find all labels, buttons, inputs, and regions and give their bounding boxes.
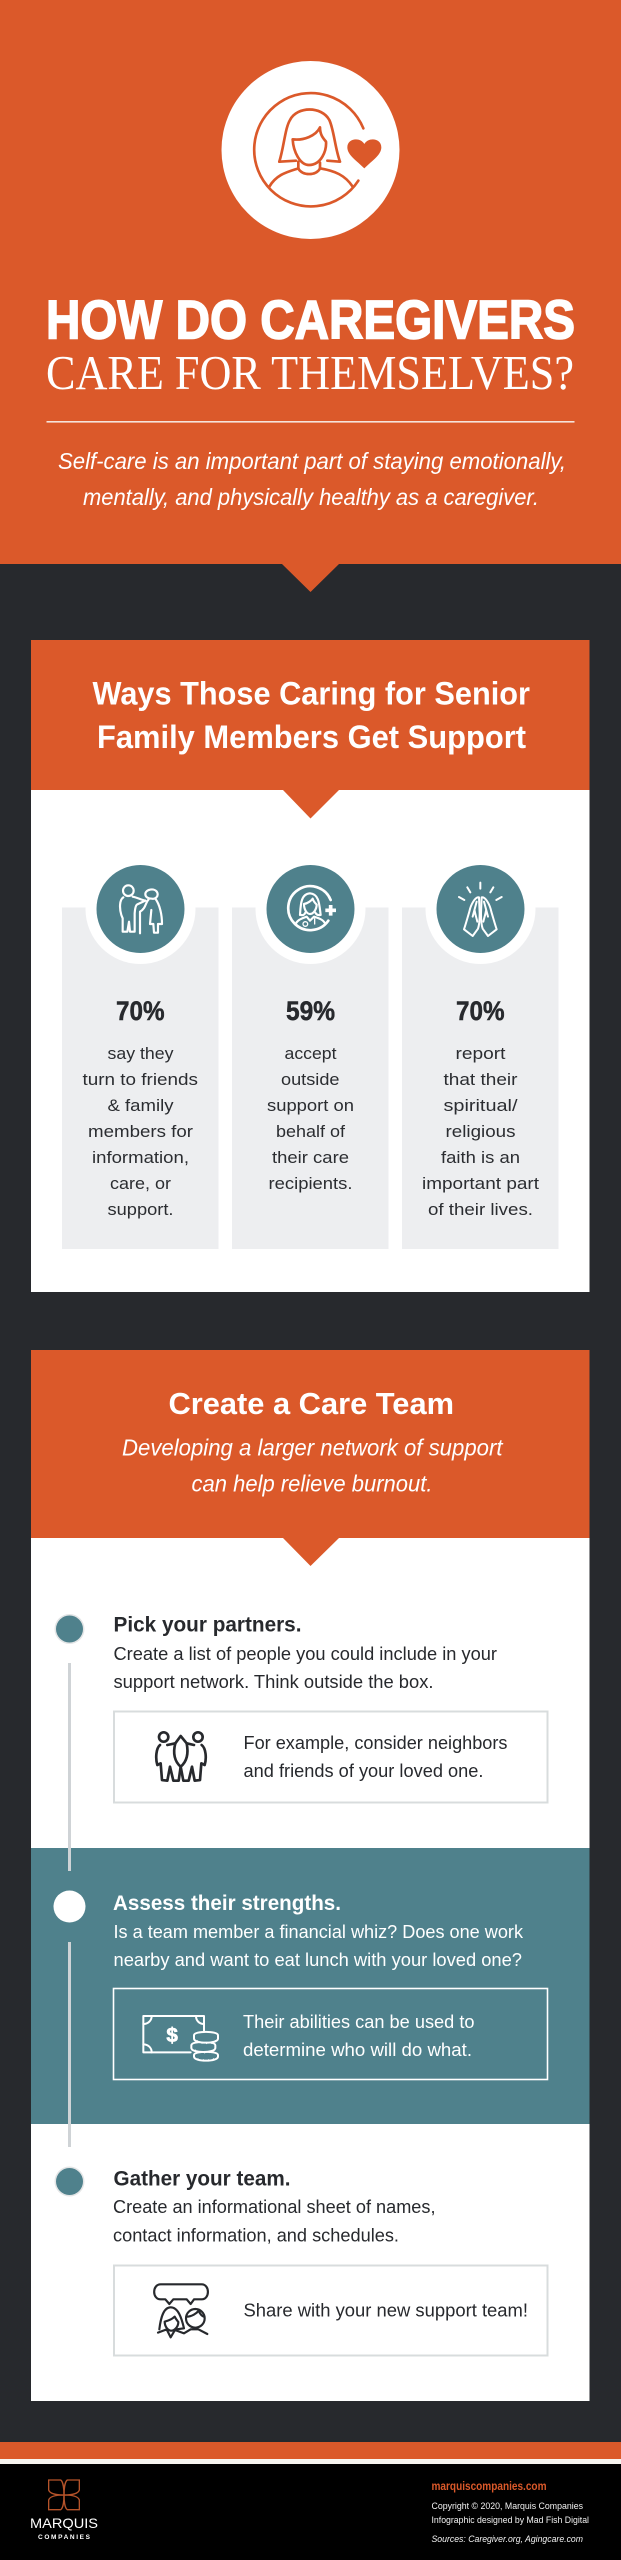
logo: Marquis Companies: MARQUIS (30, 2515, 98, 2531)
heading: Family Members Get Support (97, 719, 526, 755)
icon: two friends (156, 1732, 206, 1781)
website and credits (432, 2481, 589, 2545)
subheading (122, 1434, 504, 1496)
callout: determine who will do what. (243, 2039, 472, 2060)
icon: money and coins: $ (166, 2024, 178, 2047)
website and credits: Infographic designed by Mad Fish Digital (432, 2515, 589, 2526)
step 3: gather your team: Create an informational sheet of names, (113, 2196, 436, 2217)
website and credits: Copyright © 2020, Marquis Companies (432, 2501, 583, 2512)
description: of their lives. (428, 1200, 533, 1219)
subheading: can help relieve burnout. (192, 1470, 432, 1496)
step 1: pick your partners: Create a list of people you could include in your (114, 1643, 497, 1664)
callout: and friends of your loved one. (244, 1760, 484, 1781)
title: CARE FOR THEMSELVES? (46, 345, 574, 400)
description: important part (422, 1174, 539, 1193)
title (46, 288, 575, 400)
timeline (54, 1614, 86, 2196)
description: behalf of (276, 1122, 345, 1141)
website and credits: marquiscompanies.com (432, 2481, 546, 2493)
card: outside support (232, 854, 388, 1249)
icon: two people with speech bubble (154, 2284, 208, 2337)
callout: Their abilities can be used to (243, 2011, 474, 2032)
description: care, or (110, 1174, 171, 1193)
callout (114, 1712, 548, 1802)
description: accept (284, 1044, 337, 1063)
heading: Ways Those Caring for Senior (92, 676, 530, 712)
callout (114, 2266, 548, 2356)
intro text (58, 448, 566, 510)
card: friends and family (62, 854, 218, 1249)
description: outside (281, 1070, 340, 1089)
step 3: gather your team: Gather your team. (114, 2168, 290, 2190)
footer (0, 2442, 621, 2560)
callout (114, 1988, 548, 2080)
logo: Marquis Companies (30, 2480, 98, 2541)
description: members for (88, 1122, 193, 1141)
intro text: mentally, and physically healthy as a caregiver. (83, 484, 539, 510)
callout: For example, consider neighbors (244, 1732, 508, 1753)
description: religious (446, 1122, 516, 1141)
step 2: assess their strengths: Is a team member a financial whiz? Does one work (114, 1921, 524, 1942)
step 1: pick your partners: Pick your partners. (114, 1614, 302, 1636)
description: faith is an (441, 1148, 520, 1167)
panel: create a care team (31, 1350, 590, 2401)
icon: money and coins (143, 2016, 218, 2061)
description: turn to friends (82, 1070, 198, 1089)
statistic: 70% (456, 996, 504, 1026)
heading (92, 676, 530, 755)
step 3: gather your team: contact information, and schedules. (113, 2224, 399, 2246)
description (267, 1044, 354, 1193)
description: support. (108, 1200, 174, 1219)
panel: ways to get support (31, 640, 590, 1292)
callout: Share with your new support team! (244, 2300, 528, 2320)
description: report (456, 1044, 506, 1063)
icon: doctor with plus (288, 886, 336, 930)
step 2: assess their strengths: Assess their strengths. (113, 1892, 341, 1915)
step 2: assess their strengths (113, 1892, 548, 2080)
icon: helping a senior (120, 885, 162, 933)
card: faith (402, 854, 558, 1249)
description (82, 1044, 198, 1219)
statistic: 70% (116, 996, 164, 1026)
description: recipients. (268, 1174, 352, 1193)
description: & family (108, 1096, 174, 1115)
icon: caregiver with heart (222, 61, 400, 239)
description: their care (272, 1148, 349, 1167)
icon: praying hands (459, 883, 502, 936)
statistic: 59% (286, 996, 335, 1026)
website and credits: Sources: Caregiver.org, Agingcare.com (432, 2534, 583, 2545)
step 1: pick your partners (114, 1614, 548, 1802)
heading: Create a Care Team (168, 1386, 454, 1421)
subheading: Developing a larger network of support (122, 1434, 504, 1460)
description: that their (444, 1070, 518, 1089)
description (422, 1044, 539, 1219)
panel: hero header (0, 0, 621, 592)
logo: Marquis Companies: COMPANIES (38, 2534, 91, 2541)
step 1: pick your partners: support network. Think outside the box. (114, 1671, 434, 1692)
teal band (31, 1848, 590, 2124)
step 3: gather your team (113, 2168, 548, 2356)
description: support on (267, 1096, 354, 1115)
description: information, (92, 1148, 189, 1167)
description: spiritual/ (444, 1096, 518, 1115)
description: say they (108, 1044, 174, 1063)
intro text: Self-care is an important part of staying emotionally, (58, 448, 566, 474)
step 2: assess their strengths: nearby and want to eat lunch with your loved one? (114, 1949, 522, 1970)
